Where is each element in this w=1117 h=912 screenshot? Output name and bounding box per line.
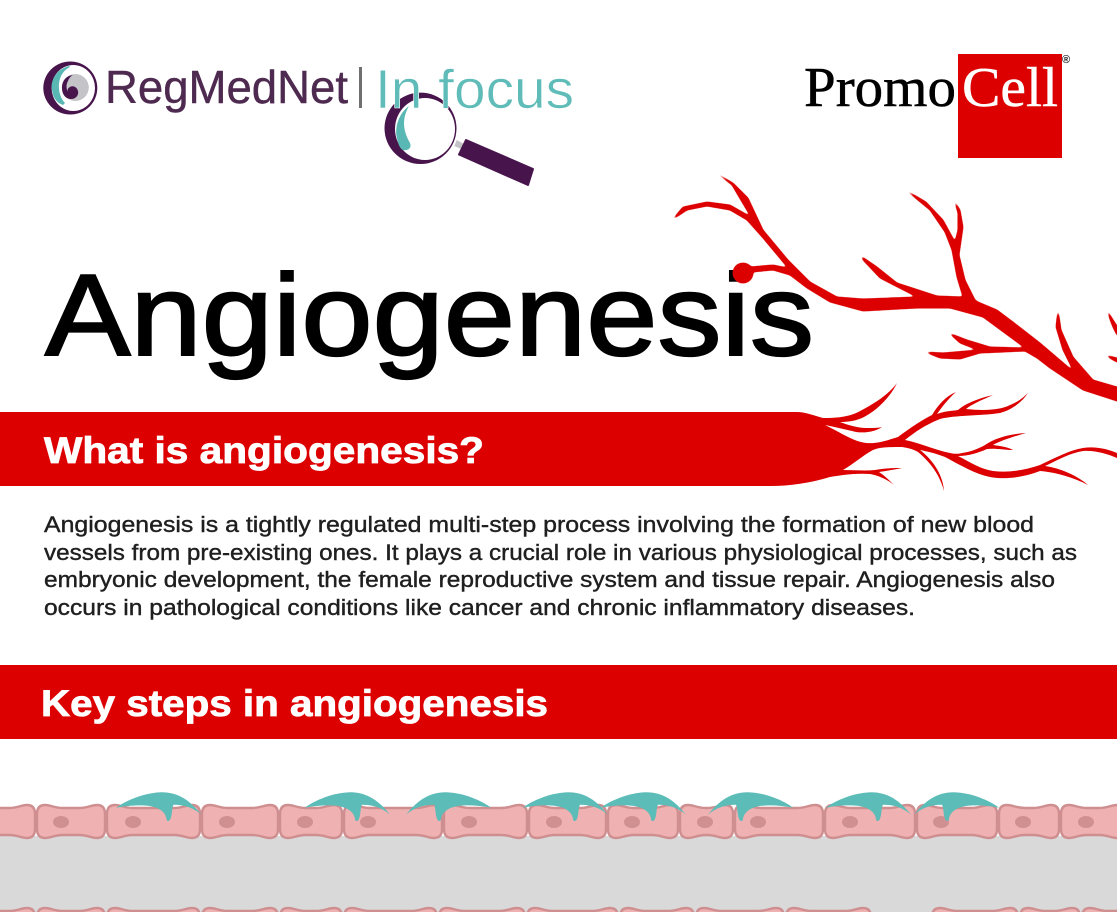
red band with vessel [0,383,1117,491]
wordmark Cell: Cell [962,57,1058,119]
registered mark: ® [1062,54,1070,66]
text block: definition paragraph [44,512,1077,620]
wordmark Promo: Promo [804,57,956,119]
in focus label: In focus [375,58,574,120]
vessel lumen [0,836,1117,912]
endothelial cells upper row [0,805,1117,838]
section band: what is angiogenesis [0,383,1117,491]
divider bar [359,67,362,108]
endothelial cells lower row [0,908,1117,912]
red square [958,54,1062,158]
diagram: blood vessel cross-section [0,792,1117,912]
illustration: upper blood vessel [672,170,1117,404]
text block: definition paragraph: Angiogenesis is a tightly regulated multi-step process involving the formation of new blood [44,512,1034,537]
logo: PromoCell [804,54,1070,158]
brand name: RegMedNet [105,61,348,113]
text block: definition paragraph: vessels from pre-existing ones. It plays a crucial role in various physiological processes, such as [44,540,1077,565]
text block: definition paragraph: embryonic development, the female reproductive system and tissue repair. Angiogenesis also [44,567,1055,592]
cut-off branch at right edge [1107,309,1117,338]
red band [0,665,1117,739]
vessel tip dot [733,263,753,283]
cell nuclei [53,816,1094,828]
logo: RegMedNet In focus [43,58,574,185]
pericytes teal [116,792,999,821]
heading: Key steps in angiogenesis [41,683,548,724]
cut-off branch at right edge lower [1106,355,1117,364]
title: Angiogenesis [45,250,814,380]
icon: RegMedNet swirl [43,62,97,114]
text block: definition paragraph: occurs in pathological conditions like cancer and chronic inflammatory diseases. [44,595,915,620]
icon: magnifying glass [384,93,533,185]
section band: key steps [0,665,1117,739]
heading: What is angiogenesis? [44,430,484,471]
